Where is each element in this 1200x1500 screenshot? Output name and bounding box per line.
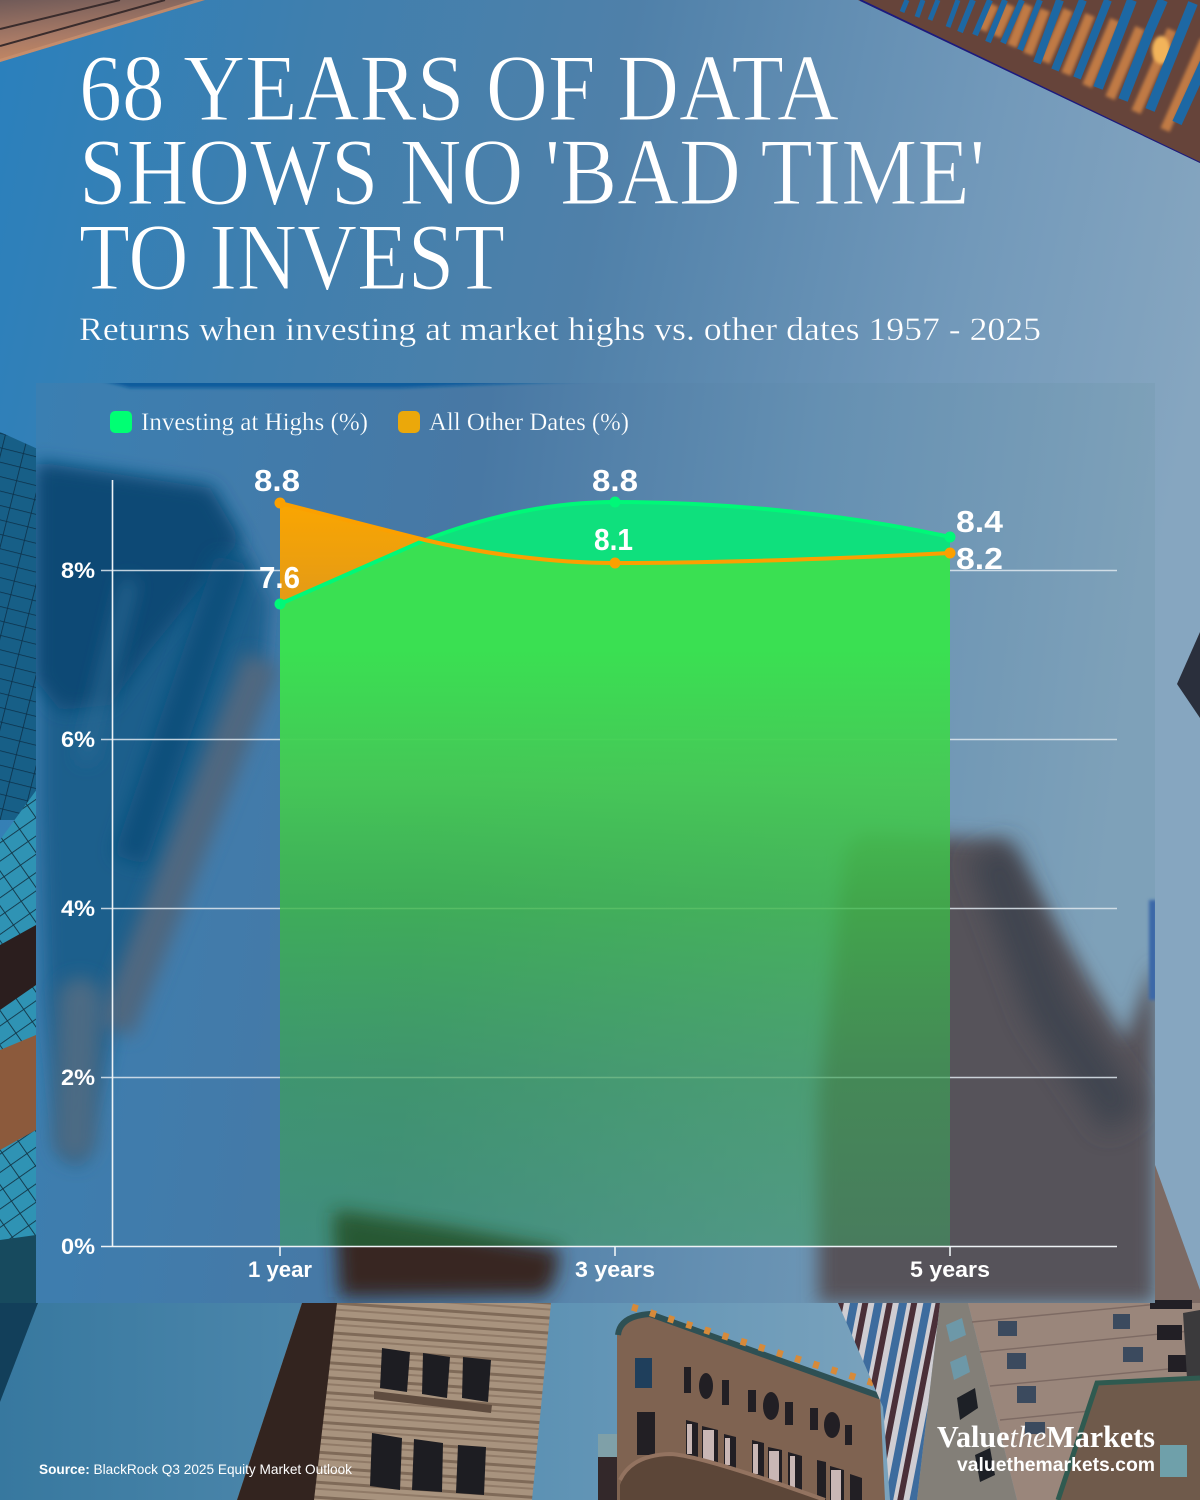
- data labels: 8.8: [592, 463, 638, 498]
- title: SHOWS NO 'BAD TIME': [79, 119, 985, 225]
- logo and website: [937, 1419, 1155, 1476]
- orange area: all other dates: [280, 503, 425, 604]
- panel background: [36, 383, 1155, 1303]
- logo wordmark: ValuetheMarkets: [937, 1419, 1155, 1454]
- data labels: 8.8: [254, 463, 300, 498]
- background: left glass building: [0, 432, 36, 1303]
- axes: [101, 480, 1117, 1256]
- title: TO INVEST: [79, 204, 505, 310]
- panel: chart card: [36, 380, 1155, 1303]
- panel blurred building reflections: [36, 380, 1155, 1303]
- y axis labels: 4%: [61, 896, 95, 921]
- y axis labels: 0%: [61, 1234, 95, 1259]
- background: lower-right tan building: [968, 1300, 1200, 1500]
- title: 68 YEARS OF DATA: [79, 35, 839, 141]
- background: top-right building: [850, 0, 1200, 170]
- data labels: [254, 463, 1004, 595]
- data labels: 8.4: [956, 504, 1004, 539]
- band between curves: [425, 502, 950, 563]
- background: lower-left masonry building: [237, 1303, 551, 1500]
- y axis labels: 8%: [61, 558, 95, 583]
- data labels: 8.1: [594, 522, 633, 557]
- subtitle: Returns when investing at market highs vs. other dates 1957 - 2025: [79, 312, 1041, 348]
- y axis labels: [61, 558, 95, 1259]
- y axis labels: 6%: [61, 727, 95, 752]
- y axis labels: 2%: [61, 1065, 95, 1090]
- shadow tint inside green area: [328, 1206, 560, 1246]
- data labels: 7.6: [259, 560, 300, 595]
- data labels: 8.2: [956, 541, 1003, 576]
- line: investing at highs: [274, 496, 956, 610]
- legend item: all other dates: All Other Dates (%): [429, 409, 629, 436]
- background: top-left building corner: [0, 0, 205, 62]
- legend item: investing at highs: Investing at Highs (%): [141, 409, 368, 436]
- website: valuethemarkets.com: [957, 1455, 1155, 1476]
- x axis labels: 1 year: [248, 1257, 312, 1282]
- background: lower sky strip: [0, 1303, 1200, 1500]
- background: right edge building fragment: [1177, 632, 1200, 718]
- x axis labels: 5 years: [910, 1257, 990, 1282]
- x axis labels: 3 years: [575, 1257, 655, 1282]
- chart: area comparison: [61, 463, 1117, 1282]
- legend: [110, 409, 629, 436]
- title: [79, 35, 985, 310]
- x axis labels: [248, 1257, 990, 1282]
- background: lower-middle ornate building: [598, 1307, 885, 1500]
- green area: investing at highs: [280, 502, 950, 1247]
- background: lower-right striped tower: [830, 1300, 1017, 1500]
- source note: Source: BlackRock Q3 2025 Equity Market Outlook: [39, 1461, 353, 1477]
- line: all other dates: [274, 498, 956, 568]
